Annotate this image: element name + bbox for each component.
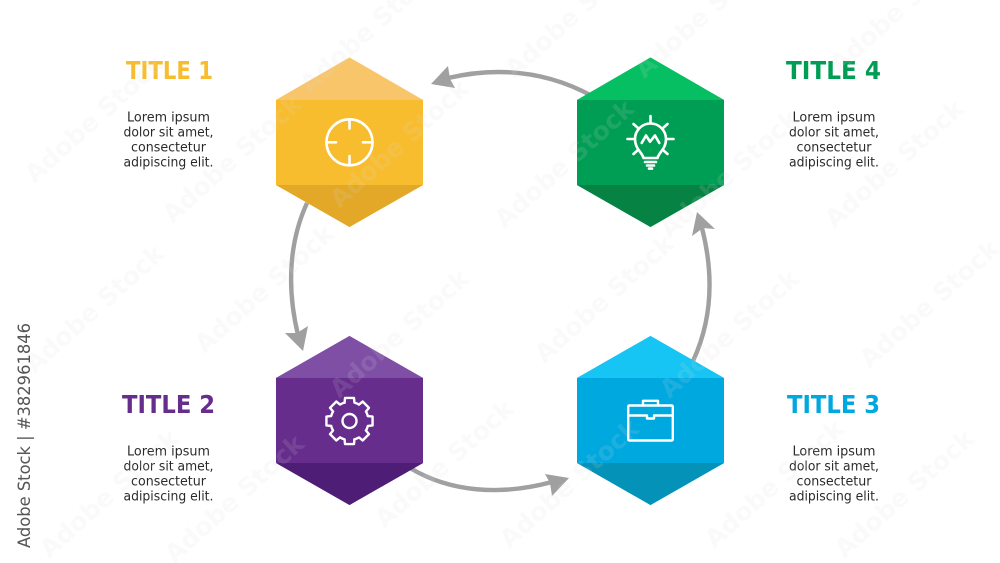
text: step 3 description	[789, 444, 879, 504]
watermark pattern: Adobe Stock	[654, 103, 806, 244]
block: step 2 text	[122, 390, 215, 504]
watermark pattern: Adobe Stock	[189, 218, 341, 359]
watermark pattern: Adobe Stock	[529, 228, 681, 369]
text: step 2 description: dolor sit amet,	[124, 460, 214, 474]
watermark pattern: Adobe Stock	[829, 423, 981, 563]
panel: hexagon 4 green	[577, 58, 724, 227]
icon: light bulb	[628, 116, 674, 169]
text: step 2 description: adipiscing elit.	[124, 490, 214, 504]
watermark pattern: Adobe Stock	[324, 263, 476, 404]
watermark pattern: Adobe Stock	[157, 88, 309, 229]
watermark pattern: Adobe Stock	[494, 413, 646, 554]
text: step 4 description: dolor sit amet,	[789, 126, 879, 140]
block: step 3 text	[787, 390, 880, 504]
panel: hexagon 1 yellow	[276, 58, 423, 227]
watermark pattern: Adobe Stock	[34, 423, 186, 563]
text: step 2 description: Lorem ipsum	[127, 444, 210, 460]
heading: title 3: TITLE 3	[787, 390, 880, 419]
icon: crosshair target	[326, 119, 372, 165]
text: step 3 description: consectetur	[796, 474, 872, 490]
text: step 2 description: consectetur	[131, 474, 207, 490]
text: step 1 description: consectetur	[131, 140, 207, 156]
text: step 4 description: adipiscing elit.	[789, 156, 879, 170]
panel: hexagon 2 purple	[276, 336, 423, 505]
watermark pattern: Adobe Stock	[369, 393, 521, 534]
arrow: step 1 to step 2	[285, 203, 308, 351]
text: step 3 description: adipiscing elit.	[789, 490, 879, 504]
panel: hexagon 3 blue	[577, 336, 724, 505]
credit: vertical stock id: Adobe Stock | #382961846	[15, 323, 35, 548]
text: step 3 description: dolor sit amet,	[789, 460, 879, 474]
watermark pattern: Adobe Stock	[19, 48, 171, 189]
watermark pattern: Adobe Stock	[324, 73, 476, 214]
text: step 4 description: consectetur	[796, 140, 872, 156]
arrow: step 2 to step 3	[410, 468, 569, 496]
watermark pattern: Adobe Stock	[489, 93, 641, 234]
block: step 4 text	[786, 56, 881, 170]
text: step 2 description	[124, 444, 214, 504]
text: step 3 description: Lorem ipsum	[792, 444, 876, 460]
arrow: step 3 to step 4	[692, 212, 715, 361]
text: step 1 description: dolor sit amet,	[124, 126, 214, 140]
watermark pattern: Adobe Stock	[699, 413, 851, 554]
arrow: step 4 to step 1	[431, 66, 592, 96]
watermark pattern: Adobe Stock	[19, 238, 171, 379]
text: step 1 description: adipiscing elit.	[124, 156, 214, 170]
watermark pattern: Adobe Stock	[654, 263, 806, 404]
text: step 4 description: Lorem ipsum	[792, 110, 876, 126]
text: step 1 description: Lorem ipsum	[127, 110, 210, 126]
text: step 4 description	[789, 110, 879, 170]
text: step 1 description	[124, 110, 214, 170]
icon: briefcase	[628, 401, 673, 440]
heading: title 4: TITLE 4	[786, 56, 881, 85]
watermark pattern: Adobe Stock	[819, 93, 971, 234]
icon: gear	[326, 398, 373, 444]
heading: title 2: TITLE 2	[122, 390, 215, 419]
heading: title 1: TITLE 1	[126, 56, 213, 85]
block: step 1 text	[124, 56, 214, 170]
